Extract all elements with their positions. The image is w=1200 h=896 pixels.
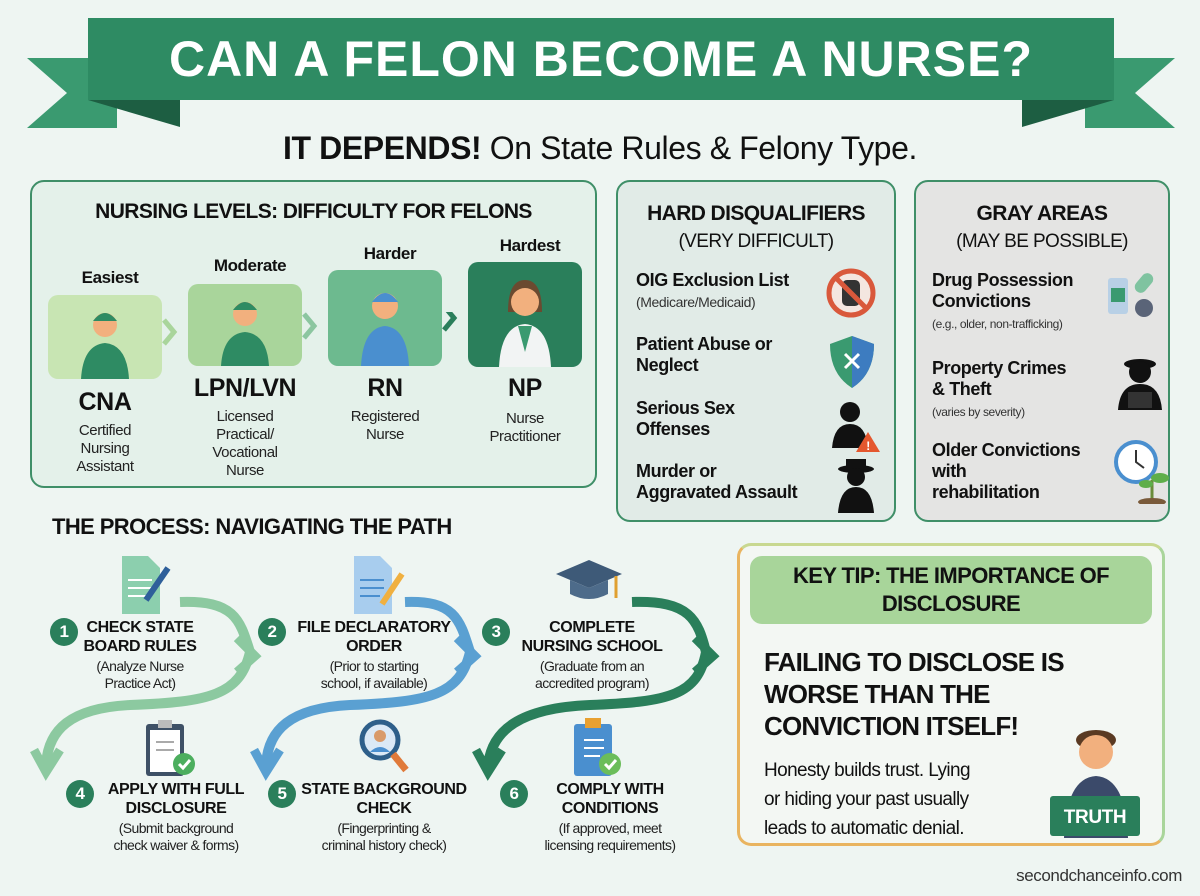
item: patient abuse: Neglect <box>636 355 698 375</box>
step 1: CHECK STATE <box>86 619 194 636</box>
panel: nursing levels <box>30 180 597 488</box>
footer: source: secondchanceinfo.com <box>1016 866 1182 885</box>
panel: hard disqualifiers <box>616 180 896 522</box>
step 5: (Fingerprinting & <box>337 820 431 836</box>
body text: leads to automatic denial. <box>764 818 964 839</box>
step 6: CONDITIONS <box>562 800 658 817</box>
step 2: 2 <box>267 622 277 641</box>
heading: the process: THE PROCESS: NAVIGATING THE PATH <box>52 514 452 539</box>
panel: hard disqualifiers: ! <box>866 439 870 453</box>
key tip header: DISCLOSURE <box>882 591 1020 616</box>
icon: clipboard check <box>146 720 195 776</box>
level: LPN/LVN: Nurse <box>226 462 264 479</box>
step 4: APPLY WITH FULL <box>108 781 244 798</box>
body text: Honesty builds trust. Lying <box>764 760 970 781</box>
step 1 <box>50 556 196 691</box>
heading: hard disqualifiers: HARD DISQUALIFIERS <box>647 202 865 225</box>
item: older convictions: Older Convictions <box>932 440 1080 460</box>
step 4: DISCLOSURE <box>126 800 226 817</box>
heading: gray areas: GRAY AREAS <box>977 202 1107 225</box>
icon: magnifier <box>360 720 409 772</box>
level: NP <box>468 236 582 445</box>
level: RN: Nurse <box>366 426 404 443</box>
level: LPN/LVN: Licensed <box>217 408 273 425</box>
level: RN: Registered <box>351 408 419 425</box>
item: drug possession: Drug Possession <box>932 270 1073 290</box>
step 4: check waiver & forms) <box>113 837 239 853</box>
icon: document pen <box>122 556 170 614</box>
item: OIG: OIG Exclusion List <box>636 270 789 290</box>
step 2: (Prior to starting <box>330 658 418 674</box>
title banner: CAN A FELON BECOME A NURSE? <box>169 31 1033 87</box>
key message: WORSE THAN THE <box>764 679 990 709</box>
heading: nursing levels: NURSING LEVELS: DIFFICULTY FOR FELONS <box>95 200 532 223</box>
level: RN: RN <box>367 374 403 402</box>
item: drug possession: (e.g., older, non-trafficking) <box>932 317 1063 331</box>
level: LPN/LVN: Vocational <box>212 444 278 461</box>
level: CNA: Easiest <box>82 268 138 287</box>
item: drug possession: Convictions <box>932 291 1031 311</box>
panel: key tip <box>737 543 1165 846</box>
step 6: 6 <box>509 784 519 803</box>
step 5: 5 <box>277 784 287 803</box>
step 6 <box>500 718 676 853</box>
item: property crimes: (varies by severity) <box>932 405 1025 419</box>
level: NP: Practitioner <box>489 428 561 445</box>
panel: gray areas <box>914 180 1170 522</box>
step 1: Practice Act) <box>105 675 175 691</box>
item: property crimes: & Theft <box>932 379 991 399</box>
icon: graduation cap <box>556 560 622 599</box>
step 6: COMPLY WITH <box>556 781 664 798</box>
level: CNA: Assistant <box>76 458 134 475</box>
level: CNA <box>48 268 162 475</box>
key tip header <box>750 556 1152 624</box>
step 3: COMPLETE <box>549 619 635 636</box>
item: sex offenses: Offenses <box>636 419 710 439</box>
item: drug possession <box>932 270 1154 331</box>
key tip header: KEY TIP: THE IMPORTANCE OF <box>793 563 1109 588</box>
icon: person holding TRUTH sign <box>1050 730 1140 838</box>
level: LPN/LVN <box>188 256 302 479</box>
body text <box>764 760 970 839</box>
item: property crimes: Property Crimes <box>932 358 1066 378</box>
step 1: 1 <box>59 622 69 641</box>
item: murder: Murder or <box>636 461 716 481</box>
level: CNA: Nursing <box>81 440 129 457</box>
icon: checklist clipboard <box>574 718 621 776</box>
step 5 <box>268 720 467 853</box>
item: sex offenses: Serious Sex <box>636 398 735 418</box>
level: CNA: Certified <box>79 422 131 439</box>
item: older convictions <box>932 440 1169 504</box>
item: OIG: (Medicare/Medicaid) <box>636 294 755 310</box>
step 2 <box>258 556 451 691</box>
icon: person holding TRUTH sign: TRUTH <box>1064 807 1126 828</box>
title banner <box>27 18 1175 128</box>
key message <box>764 647 1064 741</box>
step 3: (Graduate from an <box>540 658 644 674</box>
level: RN: Harder <box>364 244 416 263</box>
heading: hard disqualifiers: (VERY DIFFICULT) <box>678 231 834 252</box>
step 4 <box>66 720 244 853</box>
heading: gray areas <box>956 202 1128 252</box>
level: LPN/LVN: Moderate <box>214 256 286 275</box>
item: OIG <box>636 268 876 318</box>
icon: declaratory document <box>354 556 404 614</box>
step 6: (If approved, meet <box>559 820 661 836</box>
level: LPN/LVN: LPN/LVN <box>194 374 296 402</box>
level: CNA: CNA <box>79 388 131 416</box>
item: older convictions: rehabilitation <box>932 482 1039 502</box>
step 2: FILE DECLARATORY <box>297 619 451 636</box>
process arrows <box>30 596 720 781</box>
subtitle: IT DEPENDS! On State Rules & Felony Type. <box>283 130 917 166</box>
step 3: NURSING SCHOOL <box>521 638 663 655</box>
step 2: ORDER <box>346 638 402 655</box>
step 5: criminal history check) <box>322 837 446 853</box>
heading: gray areas: (MAY BE POSSIBLE) <box>956 231 1128 252</box>
level: NP: NP <box>508 374 542 402</box>
step 2: school, if available) <box>321 675 427 691</box>
key message: FAILING TO DISCLOSE IS <box>764 647 1064 677</box>
step 3: 3 <box>491 622 501 641</box>
step 3: accredited program) <box>535 675 649 691</box>
step 6: licensing requirements) <box>545 837 675 853</box>
item: sex offenses <box>636 398 880 453</box>
item: older convictions: with <box>932 461 966 481</box>
level: RN <box>328 244 442 443</box>
item: patient abuse: Patient Abuse or <box>636 334 772 354</box>
item: patient abuse <box>636 334 874 388</box>
item: murder <box>636 459 874 513</box>
step 1: (Analyze Nurse <box>96 658 184 674</box>
arrows between levels <box>162 312 458 346</box>
key message: CONVICTION ITSELF! <box>764 711 1018 741</box>
heading: hard disqualifiers <box>647 202 865 252</box>
body text: or hiding your past usually <box>764 789 969 810</box>
step 4: (Submit background <box>119 820 233 836</box>
step 5: STATE BACKGROUND <box>301 781 467 798</box>
step 5: CHECK <box>357 800 411 817</box>
item: murder: Aggravated Assault <box>636 482 797 502</box>
step 1: BOARD RULES <box>84 638 196 655</box>
level: NP: Nurse <box>506 410 544 427</box>
step 3 <box>482 560 663 691</box>
step 4: 4 <box>75 784 85 803</box>
item: property crimes <box>932 358 1162 419</box>
level: NP: Hardest <box>500 236 560 255</box>
level: LPN/LVN: Practical/ <box>216 426 274 443</box>
